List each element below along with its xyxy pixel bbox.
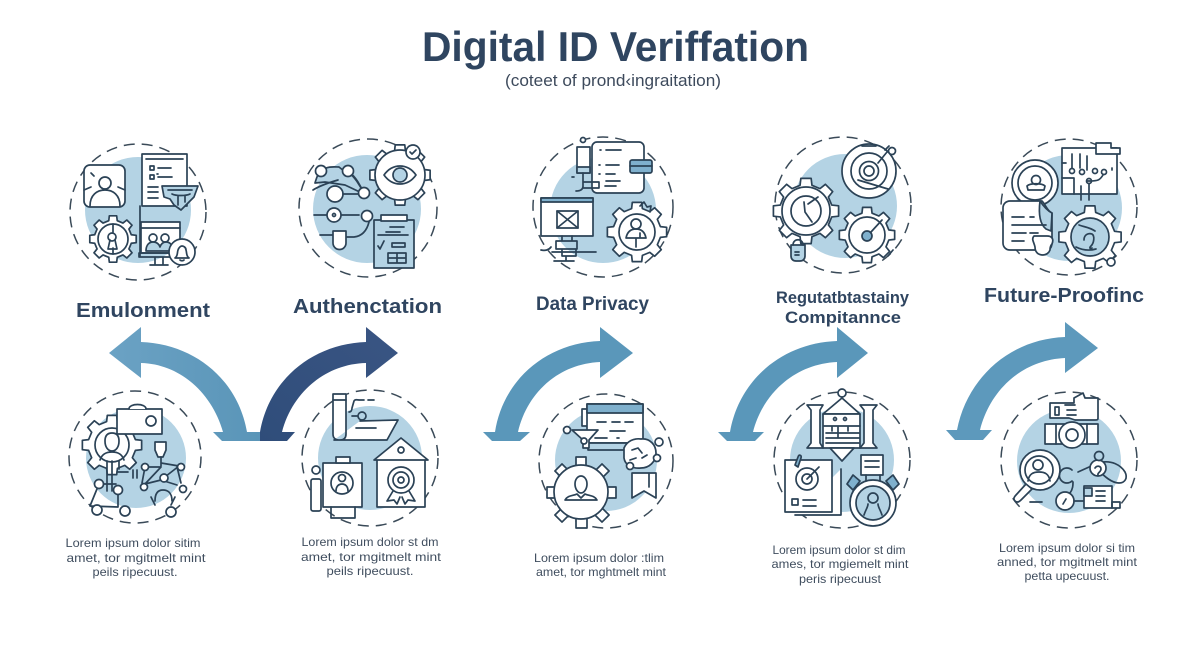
icon: nodes hub [140, 442, 186, 517]
heading: Future-Proofinc: Future-Proofinc [984, 285, 1144, 307]
description 2: peils ripecuust. [326, 564, 414, 578]
icon: person gear [82, 415, 142, 491]
heading: Authenctation: Authenctation [293, 295, 442, 318]
arrow: left pointing [109, 327, 260, 441]
icon: globe nodes [624, 438, 663, 470]
description 4 [772, 543, 909, 586]
description 3: Lorem ipsum dolor :tlim [534, 551, 664, 565]
description 2 [301, 535, 442, 578]
icon: note card [861, 455, 883, 481]
icon: circuit board [1062, 143, 1120, 200]
icon: test tube [572, 138, 599, 191]
icon: monitor with people [139, 206, 180, 265]
icon: photo ID frame [84, 165, 125, 207]
icon: briefcase [117, 404, 162, 434]
description 5 [997, 541, 1138, 583]
icon: hand on card [1050, 393, 1098, 420]
description 2: amet, tor mgitmelt mint [301, 550, 442, 564]
panel: Data Privacy icon cluster [533, 137, 673, 277]
icon: linked nodes [1056, 452, 1126, 510]
icon: stopwatch [847, 475, 899, 526]
icon: person gear large [547, 457, 616, 528]
panel: bottom icon cluster 3 [539, 394, 673, 528]
description 1: Lorem ipsum dolor sitim [66, 536, 200, 550]
icon: person nodes tree [90, 470, 137, 516]
icon: bell shape [1033, 236, 1053, 255]
icon: person badge [323, 457, 362, 518]
icon: checklist document [142, 154, 187, 206]
panel: bottom icon cluster 5 [1001, 392, 1137, 528]
icon: small figure [311, 466, 321, 511]
icon: scroll tube [333, 394, 398, 440]
panel: bottom icon cluster 4 [774, 389, 910, 528]
icon: gantry machine [807, 389, 877, 461]
description 4: ames, tor mgiemelt mint [772, 557, 909, 571]
heading: Regutatbtastainy Compitannce: Regutatbtastainy [776, 289, 910, 307]
icon: magnifier person [1014, 450, 1060, 502]
panel: bottom icon cluster 1 [69, 391, 201, 523]
icon: house with award [374, 438, 428, 507]
title: Digital ID Veriffation [422, 23, 809, 70]
heading: Emulonment: Emulonment [76, 299, 210, 322]
description 5: anned, tor mgitmelt mint [997, 555, 1138, 569]
description 3 [534, 551, 667, 579]
icon: target document [785, 455, 841, 515]
description 4: peris ripecuust [799, 572, 882, 586]
icon: data card [1084, 486, 1120, 508]
icon: gauge gear [839, 207, 895, 263]
description 3: amet, tor mghtmelt mint [536, 565, 667, 579]
icon: target dial [842, 144, 896, 198]
panel: Emulonment icon cluster [70, 144, 206, 280]
heading: Regutatbtastainy Compitannce [776, 289, 910, 327]
description 5: petta upecuust. [1024, 569, 1110, 583]
icon: person lens [1012, 160, 1058, 206]
icon: browser window [582, 404, 643, 450]
description 5: Lorem ipsum dolor si tim [999, 541, 1135, 555]
panel: Future-Proofinc icon cluster [1001, 139, 1137, 275]
heading: Data Privacy: Data Privacy [536, 294, 649, 315]
description 1: amet, tor mgitmelt mint [66, 551, 206, 565]
arrow: compliance [718, 327, 868, 441]
icon: keyhole gear [90, 216, 136, 262]
description 2: Lorem ipsum dolor st dm [302, 535, 439, 549]
arrow: future-proofing [946, 322, 1098, 440]
icon: person gear [607, 202, 667, 262]
panel: Authenctation icon cluster [299, 139, 437, 277]
description 1 [66, 536, 206, 579]
icon: notes card [1003, 201, 1052, 250]
description 1: peils ripecuust. [92, 565, 178, 579]
icon: clock gear [773, 178, 839, 244]
panel: bottom icon cluster 2 [302, 390, 438, 526]
icon: node network [313, 166, 372, 250]
icon: list panel [592, 142, 652, 193]
arrow: data privacy [483, 327, 633, 441]
panel: Regulatory Compliance icon cluster [773, 137, 911, 273]
icon: camera [1045, 422, 1098, 448]
icon: bell badge [169, 239, 195, 265]
icon: folded shield [162, 186, 198, 210]
arrow: dark right pointing [260, 327, 398, 441]
icon: clipboard [374, 215, 414, 268]
icon: padlock [791, 240, 805, 261]
subtitle: (coteet of prond‹ingraitation) [505, 71, 721, 90]
icon: eye gear [370, 145, 430, 205]
heading: Regutatbtastainy Compitannce: Compitannce [785, 308, 901, 327]
description 4: Lorem ipsum dolor st dim [772, 543, 906, 557]
icon: ribbon [632, 473, 656, 498]
icon: funnel [564, 426, 598, 448]
icon: gear with spiral [1059, 206, 1121, 268]
icon: monitor with envelope [541, 198, 596, 261]
